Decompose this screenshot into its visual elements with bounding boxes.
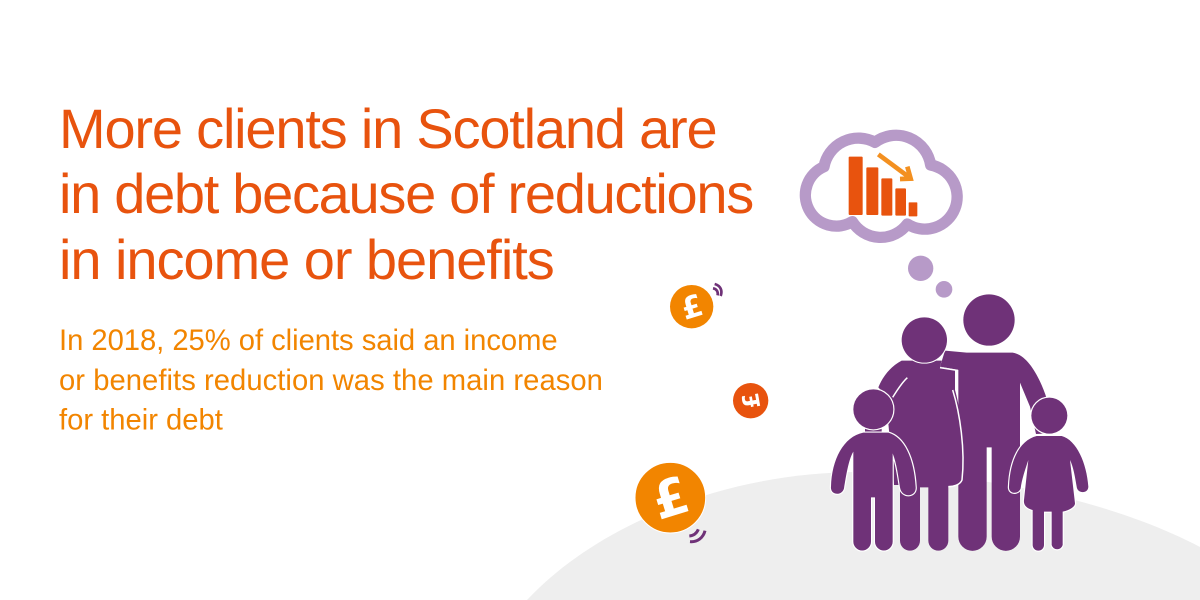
coin top: £ [677,288,707,328]
falling bar chart and thought dots [849,154,952,298]
subtitle text [59,325,603,436]
title [59,97,753,291]
ground hill [527,472,1200,600]
subtitle text: In 2018, 25% of clients said an income [59,325,558,357]
subtitle text: for their debt [59,404,223,436]
coin middle [733,383,768,418]
icon: thought cloud [805,135,957,237]
icon: family of four [831,294,1088,551]
title: in debt because of reductions [59,162,753,225]
mother [878,317,963,551]
girl [1009,398,1088,551]
coin bottom [635,462,706,542]
boy [831,389,916,550]
thought dot large [908,256,933,281]
title: in income or benefits [59,228,554,291]
title: More clients in Scotland are [59,97,716,160]
icon: pound coins [635,284,768,542]
coin bottom: £ [645,465,696,532]
father [940,294,1050,551]
coin top [670,284,721,328]
downward arrow [878,154,911,179]
thought dot small [936,281,952,298]
coin middle: £ [738,391,766,411]
falling bars [849,157,917,216]
subtitle text: or benefits reduction was the main reason [59,365,603,397]
